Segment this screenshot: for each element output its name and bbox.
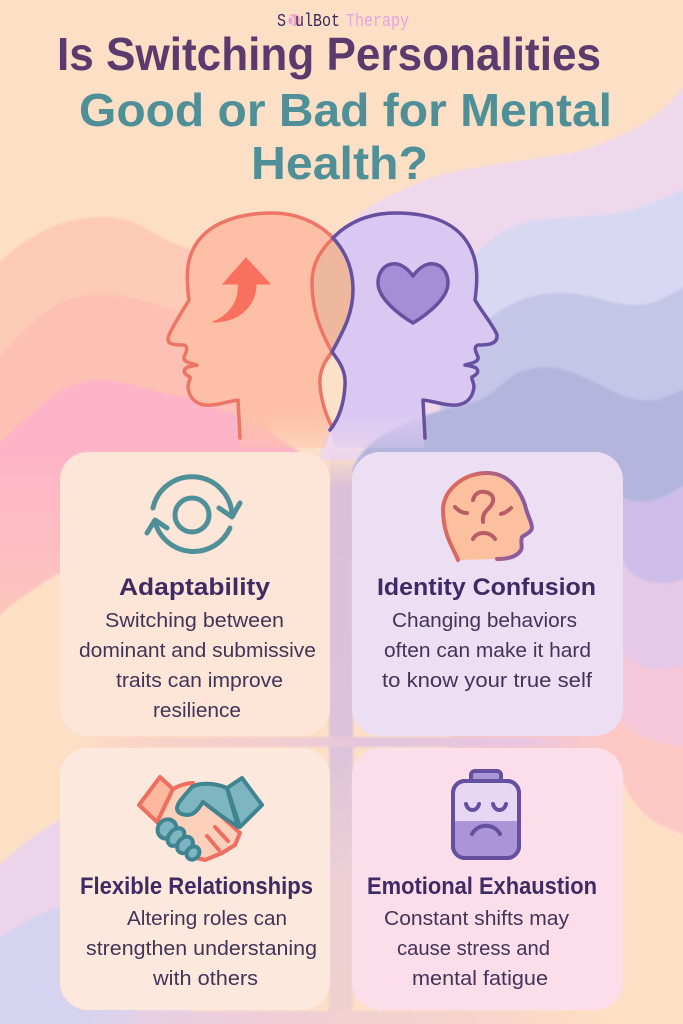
icon: curved up arrow <box>213 258 270 322</box>
overlap lens <box>312 238 353 352</box>
coral head fill <box>168 213 353 448</box>
icon: tired battery <box>453 771 519 858</box>
body text: with others <box>152 968 258 990</box>
heading: Flexible Relationships <box>80 873 313 900</box>
body text: Altering roles can <box>127 908 287 930</box>
body text <box>382 610 592 692</box>
brand label: SoulBot <box>277 12 340 32</box>
heading: Identity Confusion <box>377 574 596 601</box>
brand label <box>277 12 409 32</box>
lower gap between heads <box>320 352 345 427</box>
body text: dominant and submissive <box>79 640 316 662</box>
body text <box>384 908 569 990</box>
illustration: two overlapping heads <box>168 213 497 448</box>
body text: cause stress and <box>397 938 550 960</box>
heading: Emotional Exhaustion <box>367 873 597 900</box>
coral head outline <box>168 213 333 438</box>
icon: handshake <box>139 777 262 862</box>
panel: emotional exhaustion <box>352 748 623 1010</box>
purple head fill <box>312 213 497 448</box>
brand label: Therapy <box>346 12 409 32</box>
body text: to know your true self <box>382 670 592 692</box>
body text: mental fatigue <box>412 968 548 990</box>
title: Good or Bad for Mental <box>79 84 612 136</box>
title <box>57 28 612 189</box>
body text: often can make it hard <box>384 640 591 662</box>
body text <box>86 908 317 990</box>
icon: heart <box>378 264 448 323</box>
icon: confused head <box>443 473 532 560</box>
icon: cycle arrows <box>147 477 240 551</box>
body text: Changing behaviors <box>392 610 577 632</box>
body text: traits can improve <box>116 670 283 692</box>
title: Health? <box>251 137 428 189</box>
body text: strengthen understaning <box>86 938 317 960</box>
purple head outline <box>330 213 497 438</box>
title: Is Switching Personalities <box>57 28 601 80</box>
panel: identity confusion <box>352 452 623 736</box>
body text <box>79 610 316 722</box>
heading: Adaptability <box>119 574 271 601</box>
body text: Switching between <box>105 610 284 632</box>
body text: resilience <box>153 700 241 722</box>
body text: Constant shifts may <box>384 908 569 930</box>
panel: adaptability <box>60 452 330 736</box>
panel: flexible relationships <box>60 748 330 1010</box>
